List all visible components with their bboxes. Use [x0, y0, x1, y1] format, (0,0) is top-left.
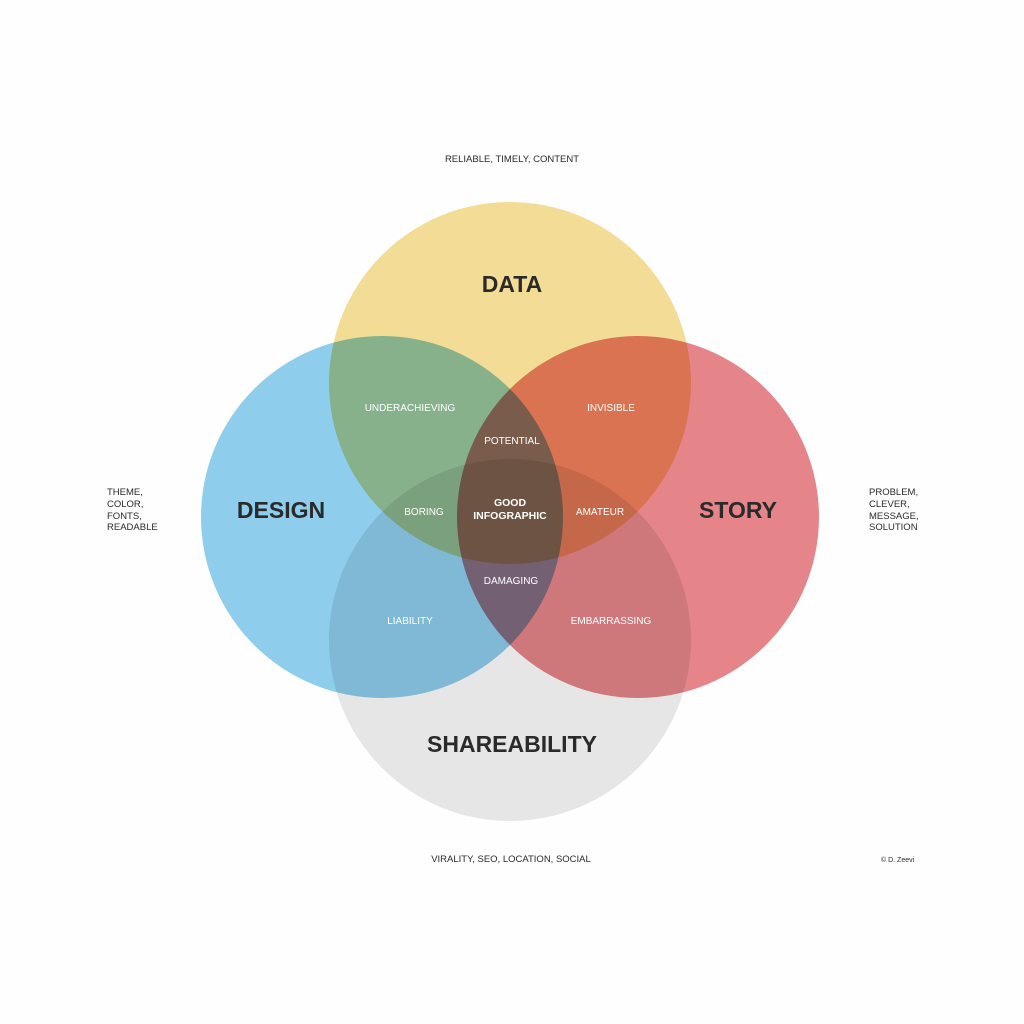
descriptors: COLOR,	[107, 499, 143, 510]
descriptors: FONTS,	[107, 511, 142, 522]
overlap labels: AMATEUR	[576, 507, 624, 518]
overlap labels: POTENTIAL	[484, 436, 540, 447]
circle: story	[457, 336, 819, 698]
descriptors: PROBLEM,	[869, 487, 918, 498]
descriptors: READABLE	[107, 522, 158, 533]
descriptors: THEME,	[107, 487, 143, 498]
overlap labels	[365, 403, 652, 627]
circle: data	[329, 202, 691, 564]
center label: INFOGRAPHIC	[473, 510, 547, 522]
center label: GOOD	[494, 497, 526, 509]
overlap labels: UNDERACHIEVING	[365, 403, 455, 414]
descriptors: © D. Zeevi	[881, 856, 915, 864]
label: data: DATA	[482, 271, 542, 297]
overlap labels: LIABILITY	[387, 616, 433, 627]
label: story: STORY	[699, 497, 777, 523]
label: shareability: SHAREABILITY	[427, 731, 597, 757]
overlap labels: EMBARRASSING	[571, 616, 652, 627]
overlap labels: DAMAGING	[484, 576, 538, 587]
descriptors: MESSAGE,	[869, 511, 919, 522]
overlap labels: INVISIBLE	[587, 403, 635, 414]
descriptors: RELIABLE, TIMELY, CONTENT	[445, 154, 579, 165]
overlap labels: BORING	[404, 507, 444, 518]
descriptors: CLEVER,	[869, 499, 910, 510]
label: design: DESIGN	[237, 497, 325, 523]
main labels	[237, 271, 777, 757]
venn circles	[201, 202, 819, 821]
circle: design	[201, 336, 563, 698]
descriptors: VIRALITY, SEO, LOCATION, SOCIAL	[431, 854, 591, 865]
circle: shareability	[329, 459, 691, 821]
descriptors	[107, 154, 919, 865]
center label	[473, 497, 547, 522]
descriptors: SOLUTION	[869, 522, 918, 533]
